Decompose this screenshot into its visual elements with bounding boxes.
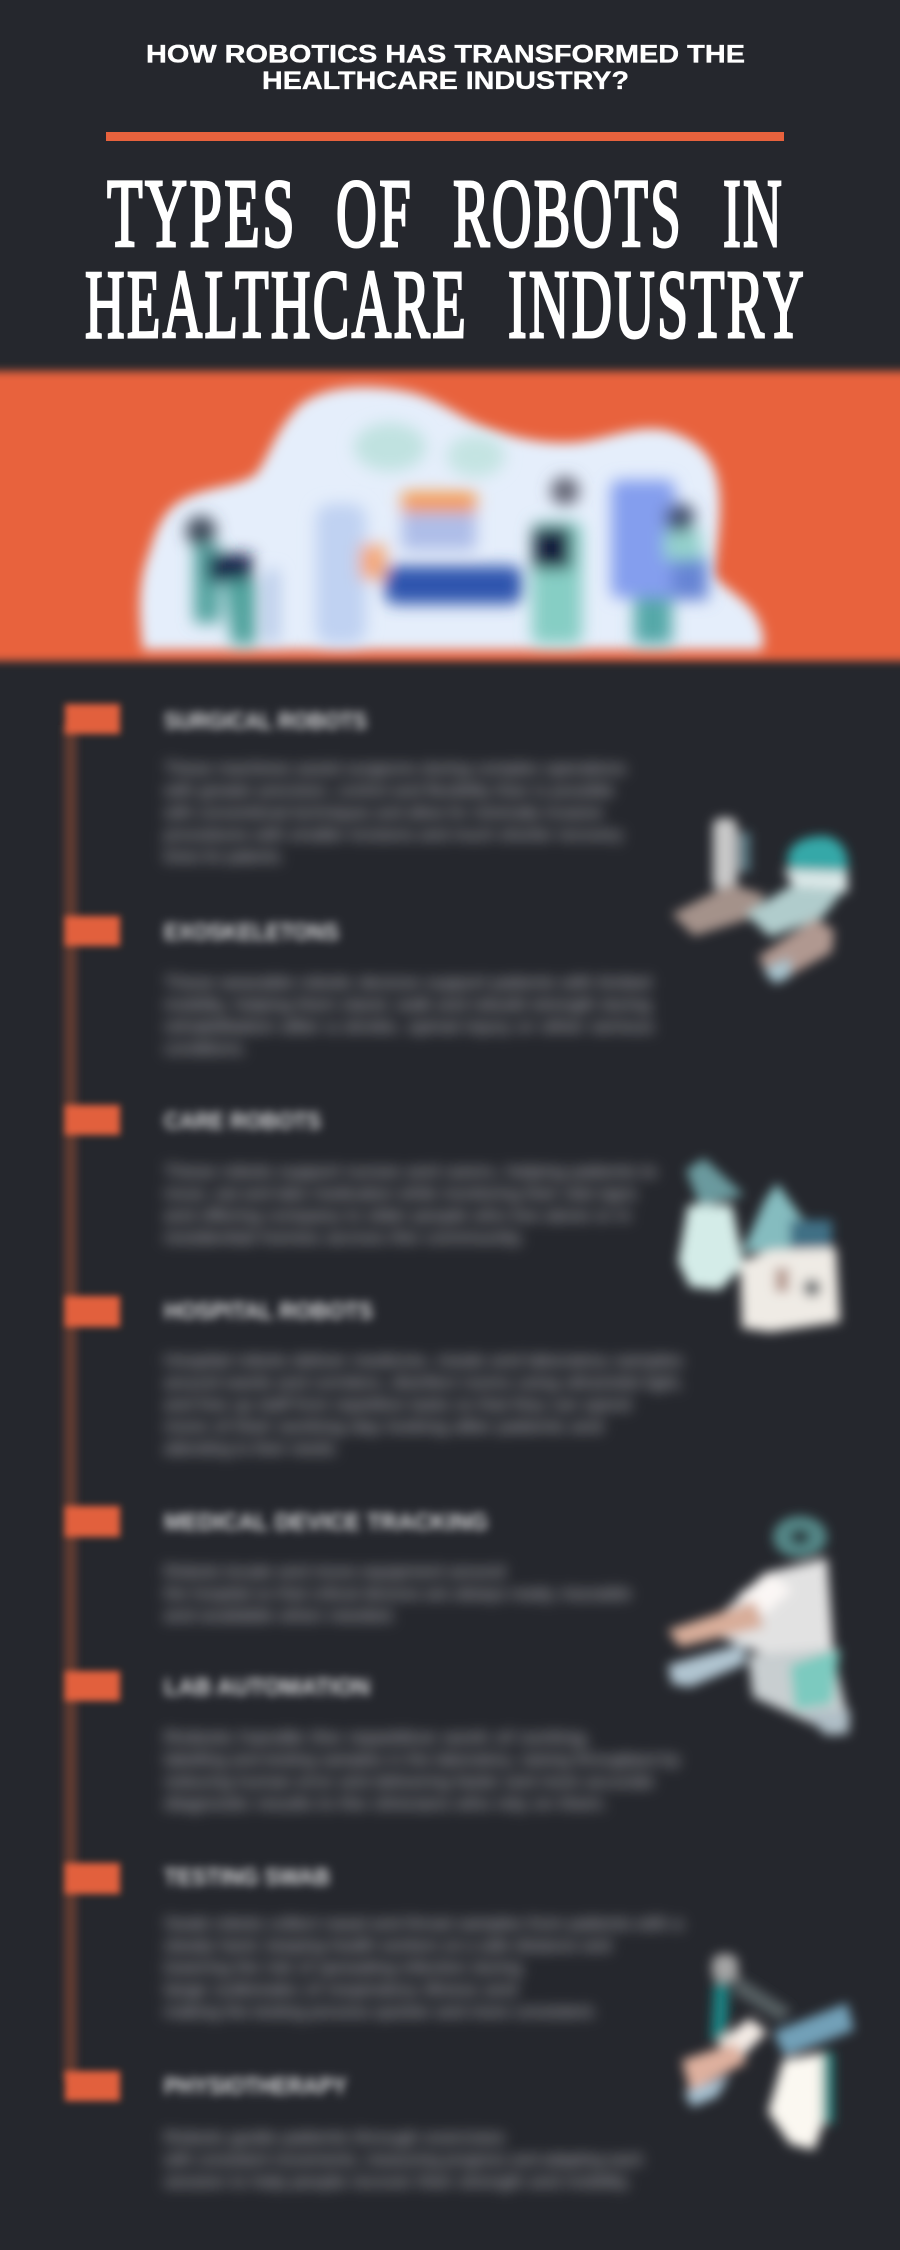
robot illustration 3: [668, 1516, 850, 1735]
body text: and free up staff from repetitive tasks so that they can spend: [164, 1395, 631, 1414]
section 6: lab automation: [164, 1674, 680, 1813]
body text: session to help people recover their strength and mobility.: [164, 2172, 631, 2191]
timeline marker 8: [65, 2071, 120, 2101]
robot illustration 2: [678, 1158, 840, 1332]
body text: and available when needed.: [164, 1606, 396, 1625]
timeline marker 3: [65, 1105, 120, 1135]
body text: residential homes across the community.: [164, 1228, 525, 1247]
title: IN: [723, 160, 784, 268]
body text: with greater precision, control and flexibility than is possible: [163, 781, 614, 800]
heading: LAB AUTOMATION: [164, 1674, 370, 1701]
section 4: hospital robots: [164, 1298, 683, 1458]
body text: [164, 1562, 631, 1625]
body text: attending to their needs.: [164, 1439, 339, 1458]
timeline marker 7: [65, 1863, 120, 1894]
heading: MEDICAL DEVICE TRACKING: [164, 1509, 488, 1536]
section 1: surgical robots: [163, 708, 626, 866]
illustration: backdrop blob: [140, 387, 763, 650]
timeline marker 2: [65, 916, 120, 946]
section 7: testing swab: [164, 1864, 684, 2021]
timeline marker 5: [65, 1506, 120, 1537]
body text: Hospital robots deliver medicine, meals and laboratory samples: [164, 1351, 683, 1370]
body text: These robots support nurses and carers, helping patients to: [164, 1162, 657, 1181]
subtitle: HEALTHCARE INDUSTRY?: [262, 67, 629, 95]
body text: These machines assist surgeons during complex operations: [164, 759, 626, 778]
body text: steady hand, keeping health workers at a safe distance and: [164, 1936, 611, 1955]
body text: more of their working day looking after patients and: [164, 1417, 603, 1436]
section 8: physiotherapy: [163, 2073, 643, 2191]
robot illustration 4: [682, 1954, 854, 2150]
heading: SURGICAL ROBOTS: [164, 708, 367, 735]
title: HEALTHCARE: [85, 251, 468, 359]
orange banner with hospital illustration: [0, 371, 900, 661]
title: TYPES: [107, 160, 297, 268]
body text: [164, 1914, 684, 2021]
body text: large outbreaks of respiratory illness and: [164, 1980, 517, 1999]
title: [85, 160, 806, 359]
body text: Robots handle the repetitive work of sorting,: [164, 1728, 591, 1747]
body text: [163, 2128, 643, 2191]
body text: conditions.: [164, 1039, 247, 1058]
body text: and offering company to older people who live alone or in: [164, 1206, 631, 1225]
body text: mobility, helping them stand, walk and rebuild strength during: [164, 995, 651, 1014]
body text: times for patients.: [164, 847, 284, 866]
body text: [164, 1728, 680, 1813]
subtitle: [146, 40, 745, 95]
body text: Robots guide patients through exercises: [164, 2128, 505, 2147]
body text: reducing human error and delivering faster and more accurate: [164, 1772, 654, 1791]
body text: labelling and testing samples in the laboratory, raising throughput by: [164, 1750, 680, 1769]
title: ROBOTS: [453, 160, 683, 268]
body text: making the testing process quicker and more consistent.: [164, 2002, 597, 2021]
heading: CARE ROBOTS: [164, 1108, 321, 1135]
body text: move, eat and take medication while monitoring their vital signs: [164, 1184, 637, 1203]
body text: procedures with smaller incisions and much shorter recovery: [164, 825, 623, 844]
body text: [164, 1351, 683, 1458]
heading: EXOSKELETONS: [164, 919, 339, 946]
timeline marker 6: [65, 1671, 120, 1701]
body text: These wearable robotic devices support patients with limited: [164, 973, 651, 992]
body text: Swab robots collect nasal and throat samples from patients with a: [164, 1914, 684, 1933]
heading: TESTING SWAB: [164, 1864, 330, 1891]
illustration: operating room scene: [186, 423, 708, 645]
body text: rehabilitation after a stroke, spinal injury or other serious: [164, 1017, 654, 1036]
body text: [163, 759, 626, 866]
title: OF: [336, 160, 413, 268]
section 3: care robots: [164, 1108, 657, 1247]
banner background: [0, 371, 900, 661]
orange divider bar: [106, 132, 784, 141]
robot illustration 1: [672, 818, 848, 984]
timeline vertical line: [64, 725, 77, 2080]
body text: [164, 973, 654, 1058]
body text: diagnostic results to the clinicians who rely on them.: [164, 1794, 608, 1813]
timeline marker 1: [65, 704, 120, 734]
body text: [164, 1162, 657, 1247]
body text: around wards and corridors, disinfect rooms using ultraviolet light,: [164, 1373, 683, 1392]
body text: with conventional techniques and allow for minimally invasive: [163, 803, 603, 822]
body text: Robots locate and move equipment around: [164, 1562, 505, 1581]
section 2: exoskeletons: [164, 919, 654, 1058]
heading: PHYSIOTHERAPY: [164, 2073, 347, 2100]
body text: lowering the risk of spreading infection during: [164, 1958, 522, 1977]
heading: HOSPITAL ROBOTS: [164, 1298, 373, 1325]
body text: the hospital so that critical devices are always ready, traceable: [164, 1584, 631, 1603]
subtitle: HOW ROBOTICS HAS TRANSFORMED THE: [146, 40, 745, 68]
timeline marker 4: [65, 1296, 120, 1327]
section 5: medical device tracking: [164, 1509, 631, 1625]
body text: with consistent movements, measuring progress and adapting each: [163, 2150, 643, 2169]
